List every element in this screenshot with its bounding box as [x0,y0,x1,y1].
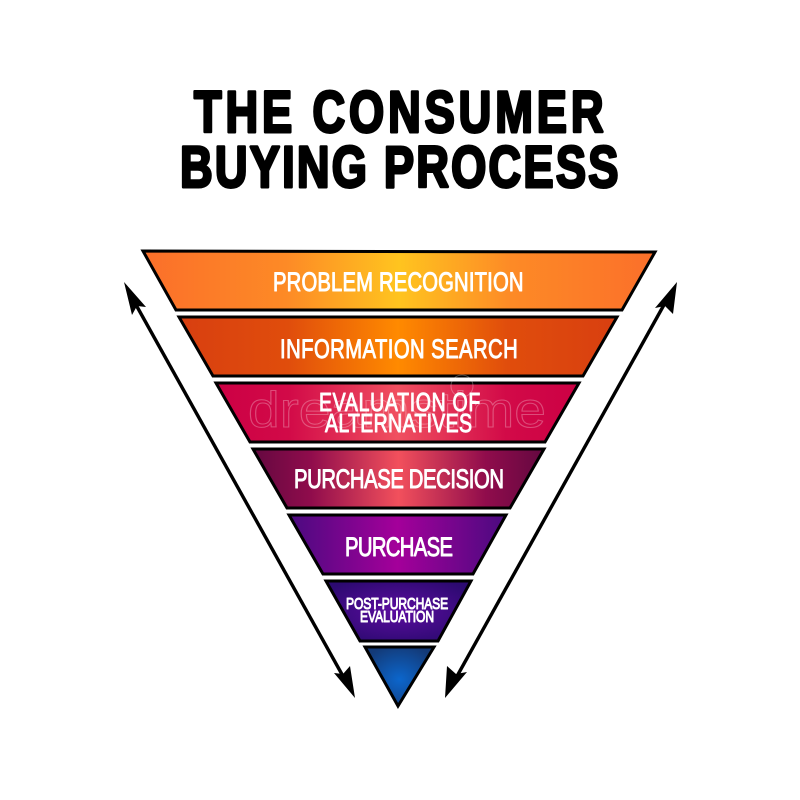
band: information search [179,317,617,376]
band: purchase [289,515,506,574]
title: THE CONSUMER [194,81,603,145]
band: evaluation of alternatives [216,383,579,442]
title [180,81,618,200]
band: purchase decision [253,449,544,508]
funnel [143,251,655,706]
band: problem recognition [143,251,655,310]
band: evaluation of alternatives: ALTERNATIVES [325,408,472,438]
band: purchase decision: PURCHASE DECISION [294,464,504,495]
band: blue tip [365,647,434,706]
watermark: dreamstime [248,382,546,438]
title: BUYING PROCESS [180,136,618,200]
band: post-purchase evaluation: POST-PURCHASE [346,595,448,612]
band: post-purchase evaluation: EVALUATION [360,608,434,625]
band: information search: INFORMATION SEARCH [280,334,518,365]
arrow: right double-headed [445,282,677,698]
arrow: left double-headed [124,282,355,698]
band: purchase: PURCHASE [345,532,453,563]
band: post-purchase evaluation [326,581,471,641]
band: problem recognition: PROBLEM RECOGNITION [273,267,524,298]
band: evaluation of alternatives: EVALUATION OF [319,387,480,417]
